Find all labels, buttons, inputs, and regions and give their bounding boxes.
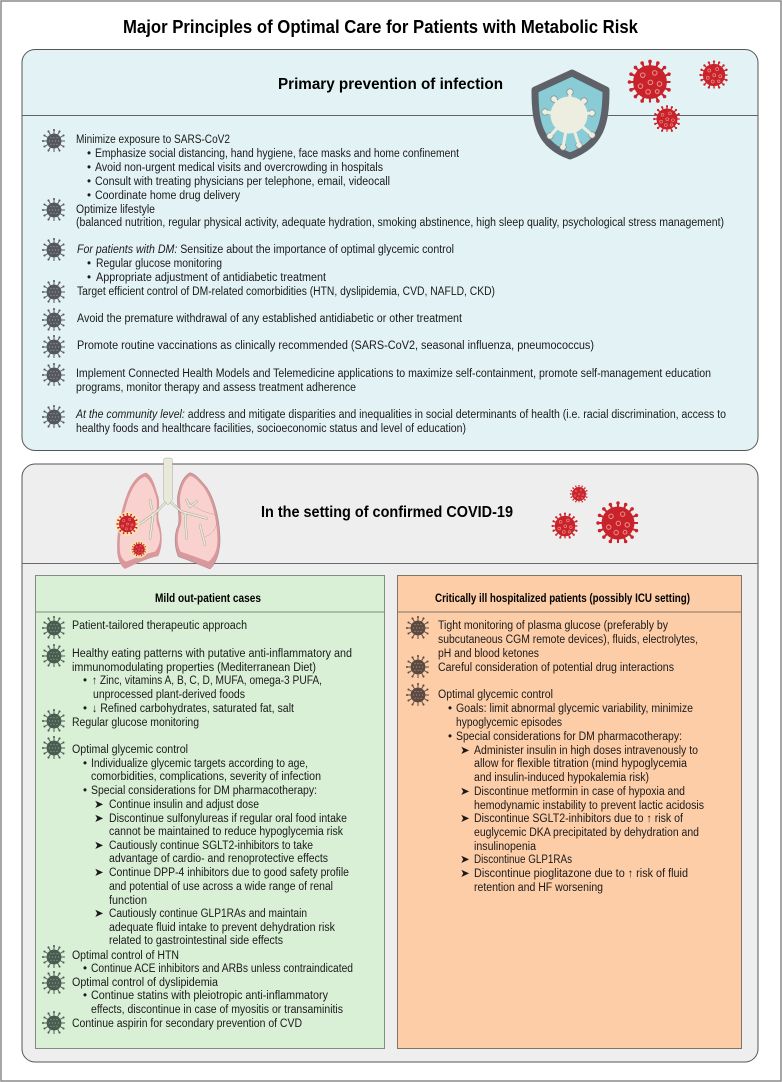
item: optimal glycemic control: Discontinue GLP1RAs	[474, 854, 572, 866]
panel: confirmed COVID-19	[22, 458, 758, 1062]
item: healthy eating: immunomodulating properties (Mediterranean Diet)	[72, 662, 316, 674]
item: community level: healthy foods and healthcare facilities, socioeconomic status and level of education)	[76, 423, 466, 435]
item: minimize exposure: Emphasize social distancing, hand hygiene, face masks and home confinement	[95, 148, 460, 160]
item: optimal glycemic control: Discontinue metformin in case of hypoxia and	[474, 786, 685, 798]
panel: primary prevention of infection	[22, 50, 758, 450]
icon: red virus small centre	[654, 106, 680, 132]
item: community level	[43, 406, 726, 435]
item: optimal control of dyslipidemia: Optimal control of dyslipidemia	[72, 977, 219, 989]
item: optimal glycemic control: euglycemic DKA precipitated by dehydration and	[474, 827, 699, 839]
item: minimize exposure: Minimize exposure to SARS-CoV2	[76, 134, 230, 146]
item: optimal glycemic control: Optimal glycemic control	[72, 744, 188, 756]
item: optimal glycemic control: Cautiously continue GLP1RAs and maintain	[109, 908, 307, 920]
item: optimal glycemic control: Continue DPP-4 inhibitors due to good safety profile	[109, 867, 349, 879]
item: optimal glycemic control: ➤	[460, 854, 470, 866]
item: regular glucose monitoring	[43, 710, 199, 732]
item: optimal glycemic control: related to gastrointestinal side effects	[109, 935, 283, 947]
item: optimal glycemic control: Discontinue pioglitazone due to ↑ risk of fluid	[474, 868, 688, 880]
item: optimal glycemic control: •	[448, 703, 452, 715]
item: optimal glycemic control: ➤	[94, 799, 104, 811]
item: optimal control of HTN: Optimal control of HTN	[72, 950, 179, 962]
item: optimal glycemic control: Special considerations for DM pharmacotherapy:	[91, 785, 317, 797]
item: minimize exposure: •	[87, 190, 91, 202]
item: vaccinations: Promote routine vaccinations as clinically recommended (SARS-CoV2, seasonal influenza, pneumococcus)	[77, 340, 594, 352]
item: optimal control of dyslipidemia: •	[83, 990, 87, 1002]
item: optimal glycemic control: Goals: limit abnormal glycemic variability, minimize	[456, 703, 693, 715]
item: optimal glycemic control: Special considerations for DM pharmacotherapy:	[456, 731, 682, 743]
item: optimal glycemic control	[43, 737, 349, 947]
item: minimize exposure: Consult with treating physicians per telephone, email, videocall	[95, 176, 390, 188]
item: optimal glycemic control: and potential of use across a wide range of renal	[109, 881, 333, 893]
item: optimal glycemic control: ➤	[94, 867, 104, 879]
item: tight monitoring: subcutaneous CGM remote devices), fluids, electrolytes,	[438, 634, 698, 646]
icon: shield with virus	[535, 73, 606, 156]
item: healthy eating: •	[83, 703, 87, 715]
item: optimize lifestyle: Optimize lifestyle	[76, 204, 155, 216]
item: tight monitoring	[407, 617, 698, 660]
item: drug interactions	[407, 656, 674, 678]
item: optimal control of HTN: •	[83, 963, 87, 975]
item: optimal glycemic control: allow for flexible titration (mind hypoglycemia	[474, 758, 688, 770]
item: minimize exposure: Avoid non-urgent medical visits and overcrowding in hospitals	[95, 162, 383, 174]
item: healthy eating	[43, 645, 352, 715]
item: optimal glycemic control: ➤	[94, 908, 104, 920]
item: patients with DM: For patients with DM: Sensitize about the importance of optimal glycemic control	[77, 244, 454, 256]
item: optimal glycemic control: hypoglycemic episodes	[456, 717, 562, 729]
item: community level: At the community level: address and mitigate disparities and inequalities in social determinants of health (i.e. racial discrimination, access to	[75, 409, 726, 421]
item: optimal glycemic control: ➤	[460, 868, 470, 880]
item: optimal control of dyslipidemia: Continue statins with pleiotropic anti-inflammatory	[91, 990, 328, 1002]
icon: red virus top	[571, 486, 587, 502]
item: aspirin	[43, 1012, 302, 1034]
item: vaccinations	[43, 336, 594, 358]
item: optimal glycemic control: •	[448, 731, 452, 743]
item: tight monitoring: Tight monitoring of plasma glucose (preferably by	[438, 620, 668, 632]
item: aspirin: Continue aspirin for secondary prevention of CVD	[72, 1018, 302, 1030]
item: minimize exposure	[43, 130, 460, 202]
item: optimal glycemic control: ➤	[460, 813, 470, 825]
item: optimal glycemic control: Continue insulin and adjust dose	[109, 799, 259, 811]
icon: red virus small right	[700, 62, 728, 88]
item: optimal glycemic control: advantage of cardio- and renoprotective effects	[109, 853, 328, 865]
item: minimize exposure: Coordinate home drug delivery	[95, 190, 240, 202]
item: healthy eating: Healthy eating patterns with putative anti-inflammatory and	[72, 648, 352, 660]
title: Major Principles of Optimal Care for Patients with Metabolic Risk	[123, 17, 639, 37]
item: tight monitoring: pH and blood ketones	[438, 648, 539, 660]
item: comorbidities: Target efficient control of DM-related comorbidities (HTN, dyslipidemia, CVD, NAFLD, CKD)	[77, 286, 495, 298]
item: optimal glycemic control: Cautiously continue SGLT2-inhibitors to take	[109, 840, 313, 852]
item: patients with DM: Appropriate adjustment of antidiabetic treatment	[96, 272, 327, 284]
item: optimal control of HTN: Continue ACE inhibitors and ARBs unless contraindicated	[91, 963, 353, 975]
item: optimal control of dyslipidemia	[43, 972, 343, 1016]
item: optimize lifestyle	[43, 199, 724, 229]
item: optimal glycemic control: function	[109, 895, 147, 907]
icon: red virus right	[598, 503, 638, 543]
heading: mild cases: Mild out-patient cases	[155, 593, 261, 605]
item: optimal glycemic control: Discontinue SGLT2-inhibitors due to ↑ risk of	[474, 813, 684, 825]
item: optimal glycemic control: ➤	[460, 745, 470, 757]
item: optimal glycemic control: •	[83, 785, 87, 797]
icon: red virus large	[629, 61, 671, 103]
item: patient-tailored	[43, 617, 247, 639]
item: optimal glycemic control: ➤	[94, 840, 104, 852]
item: patients with DM: Regular glucose monitoring	[96, 258, 222, 270]
item: optimal glycemic control: hemodynamic instability to prevent lactic acidosis	[474, 800, 704, 812]
item: patients with DM: •	[87, 258, 91, 270]
item: patients with DM	[43, 239, 454, 284]
heading: critically ill: Critically ill hospitalized patients (possibly ICU setting)	[435, 593, 690, 605]
item: regular glucose monitoring: Regular glucose monitoring	[72, 717, 199, 729]
panel: mild out-patient cases	[35, 576, 385, 1048]
item: optimal glycemic control: •	[83, 758, 87, 770]
item: optimize lifestyle: (balanced nutrition, regular physical activity, adequate hydration, smoking abstinence, high sleep quality, psychological stress management)	[76, 217, 724, 229]
item: optimal glycemic control: Optimal glycemic control	[438, 689, 553, 701]
panel: critically ill hospitalized patients	[397, 576, 742, 1048]
item: comorbidities	[43, 281, 495, 303]
item: avoid withdrawal	[43, 309, 463, 331]
item: optimal control of HTN	[43, 946, 353, 975]
heading: primary prevention: Primary prevention of infection	[278, 76, 503, 93]
item: optimal glycemic control: Discontinue sulfonylureas if regular oral food intake	[109, 813, 347, 825]
item: optimal glycemic control: Individualize glycemic targets according to age,	[91, 758, 308, 770]
item: optimal glycemic control: ➤	[94, 813, 104, 825]
item: optimal glycemic control: comorbidities, complications, severity of infection	[91, 771, 321, 783]
item: telemedicine	[43, 364, 711, 394]
item: healthy eating: •	[83, 675, 87, 687]
item: minimize exposure: •	[87, 148, 91, 160]
item: telemedicine: programs, monitor therapy and assess treatment adherence	[76, 382, 356, 394]
heading: confirmed COVID-19: In the setting of confirmed COVID-19	[261, 504, 513, 521]
icon: lungs	[115, 458, 220, 569]
item: optimal glycemic control	[407, 684, 704, 894]
item: minimize exposure: •	[87, 162, 91, 174]
item: optimal glycemic control: Administer insulin in high doses intravenously to	[474, 745, 698, 757]
item: optimal control of dyslipidemia: effects, discontinue in case of myositis or transaminitis	[91, 1004, 343, 1016]
item: optimal glycemic control: ➤	[460, 786, 470, 798]
item: optimal glycemic control: adequate fluid intake to prevent dehydration risk	[109, 922, 335, 934]
item: optimal glycemic control: insulinopenia	[474, 841, 537, 853]
item: optimal glycemic control: cannot be maintained to reduce hypoglycemia risk	[109, 826, 343, 838]
item: optimal glycemic control: retention and HF worsening	[474, 882, 603, 894]
item: telemedicine: Implement Connected Health Models and Telemedicine applications to maximize self-containment, promote self-management education	[76, 368, 711, 380]
item: minimize exposure: •	[87, 176, 91, 188]
item: drug interactions: Careful consideration of potential drug interactions	[438, 662, 674, 674]
item: healthy eating: ↓ Refined carbohydrates, saturated fat, salt	[92, 703, 295, 715]
item: patients with DM: •	[87, 272, 91, 284]
item: avoid withdrawal: Avoid the premature withdrawal of any established antidiabetic or other treatment	[77, 313, 463, 325]
item: healthy eating: ↑ Zinc, vitamins A, B, C, D, MUFA, omega-3 PUFA,	[92, 675, 322, 687]
item: patient-tailored: Patient-tailored therapeutic approach	[72, 620, 247, 632]
item: optimal glycemic control: and insulin-induced hypokalemia risk)	[474, 772, 649, 784]
item: healthy eating: unprocessed plant-derived foods	[93, 689, 245, 701]
icon: red virus left	[553, 514, 577, 538]
